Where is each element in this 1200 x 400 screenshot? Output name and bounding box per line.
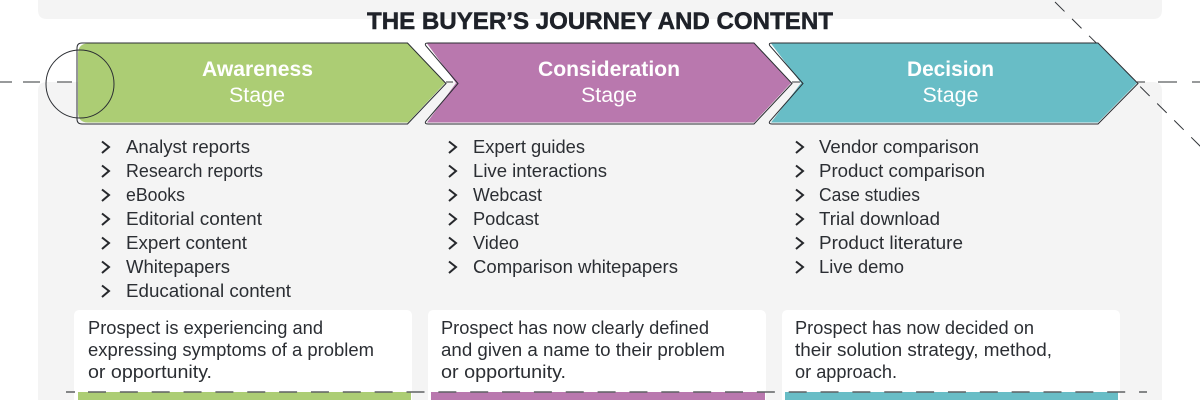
list: consideration content: Podcast: [473, 208, 539, 229]
awareness stage label: Stage: [229, 83, 285, 107]
list: awareness content: Editorial content: [126, 208, 262, 229]
list: awareness content: Expert content: [126, 232, 247, 253]
description card: consideration: and given a name to their problem: [441, 340, 725, 360]
consideration label: Consideration: [538, 58, 680, 81]
list: consideration content: Live interactions: [473, 160, 607, 181]
list: awareness content: eBooks: [126, 184, 185, 205]
list: consideration content: Expert guides: [473, 136, 585, 157]
main background panel: [38, 82, 1162, 400]
list: awareness content: Whitepapers: [126, 256, 230, 277]
list: decision content: Trial download: [819, 208, 940, 229]
description card: awareness: [74, 310, 412, 400]
description card: decision: [782, 310, 1120, 400]
list: consideration content: Video: [473, 232, 519, 253]
list: decision content: Case studies: [819, 184, 920, 205]
description card: consideration: or opportunity.: [441, 362, 566, 382]
description card: consideration: Prospect has now clearly defined: [441, 318, 709, 338]
description card: awareness: or opportunity.: [88, 362, 212, 382]
stage arrow: awareness: [77, 43, 446, 124]
dash segments between arrows: [446, 81, 800, 83]
description card: decision: their solution strategy, method,: [795, 340, 1052, 360]
description card: consideration: [428, 310, 766, 400]
right horizontal dashed line: [1137, 81, 1200, 83]
list: awareness content: [102, 136, 291, 301]
list: decision content: Vendor comparison: [819, 136, 979, 157]
title: THE BUYER’S JOURNEY AND CONTENT: [367, 8, 833, 35]
bottom bar: decision: [785, 392, 1118, 400]
list: awareness content: Educational content: [126, 280, 291, 301]
bottom bar: awareness: [78, 392, 411, 400]
stage arrow: consideration: [425, 43, 792, 124]
outline circle: [46, 50, 114, 118]
diagonal dashed line: [1055, 2, 1200, 147]
stage arrow: decision: [769, 43, 1138, 124]
list: consideration content: Webcast: [473, 184, 542, 205]
awareness label: Awareness: [202, 58, 313, 81]
bottom bar: consideration: [431, 392, 765, 400]
description card: awareness: Prospect is experiencing and: [88, 318, 323, 338]
top background panel: [38, 0, 1162, 19]
list: decision content: [796, 136, 985, 277]
list: awareness content: Research reports: [126, 160, 263, 181]
consideration stage label: Stage: [581, 83, 637, 107]
list: awareness content: Analyst reports: [126, 136, 250, 157]
list: decision content: Product comparison: [819, 160, 985, 181]
left horizontal dashed line: [0, 81, 72, 83]
description card: decision: Prospect has now decided on: [795, 318, 1034, 338]
list: decision content: Live demo: [819, 256, 904, 277]
list: decision content: Product literature: [819, 232, 963, 253]
decision stage label: Stage: [922, 83, 978, 107]
bottom dashed line: [66, 391, 1147, 393]
description card: awareness: expressing symptoms of a problem: [88, 340, 374, 360]
description card: decision: or approach.: [795, 362, 897, 382]
list: consideration content: [449, 136, 678, 277]
decision label: Decision: [907, 58, 994, 81]
list: consideration content: Comparison whitepapers: [473, 256, 678, 277]
